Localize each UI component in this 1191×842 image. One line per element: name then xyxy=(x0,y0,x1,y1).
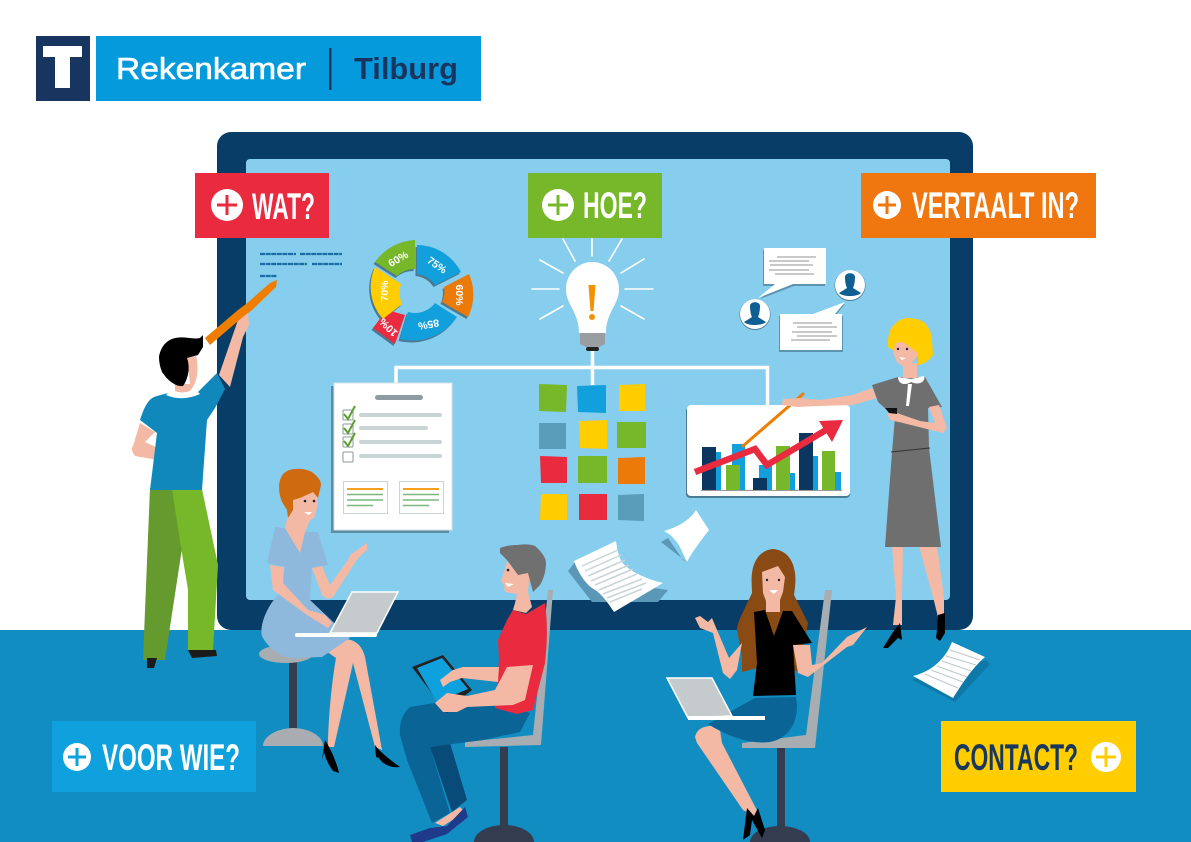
pointer stick xyxy=(743,394,803,446)
light bulb xyxy=(532,238,653,351)
label: HOE?: HOE? xyxy=(583,185,647,226)
label: VERTAALT IN?: VERTAALT IN? xyxy=(912,185,1079,226)
chair xyxy=(465,590,553,842)
flying paper large xyxy=(568,541,668,612)
facial features xyxy=(505,569,514,587)
hair xyxy=(737,549,808,672)
label: VOOR WIE? xyxy=(52,721,256,792)
waist belt xyxy=(891,448,930,452)
tablet xyxy=(412,655,472,713)
face and neck xyxy=(762,566,785,612)
label: CONTACT?: CONTACT? xyxy=(954,737,1078,778)
white collar xyxy=(166,392,200,398)
floor xyxy=(0,630,1191,842)
collar xyxy=(898,376,924,406)
face xyxy=(893,340,918,366)
seated man with tablet xyxy=(400,544,553,842)
legs xyxy=(695,726,762,820)
arms xyxy=(270,543,367,628)
hair xyxy=(279,469,321,518)
trousers xyxy=(143,488,184,660)
sock xyxy=(435,807,465,826)
skirt xyxy=(885,448,941,547)
floor paper xyxy=(912,642,990,702)
presenting woman xyxy=(782,318,947,648)
hair xyxy=(159,335,203,386)
label: HOE? xyxy=(528,173,662,238)
head and neck xyxy=(501,562,532,613)
legs xyxy=(323,639,382,750)
neck and neckline xyxy=(285,505,310,553)
bar chart card xyxy=(686,405,850,498)
shoes xyxy=(322,740,400,773)
shoes xyxy=(883,613,945,648)
legs xyxy=(892,546,944,625)
far leg xyxy=(430,743,467,812)
neck and head skin xyxy=(175,356,198,392)
sticky notes xyxy=(539,384,646,521)
donut chart: 60% xyxy=(453,284,465,306)
hair xyxy=(888,318,933,365)
laptop xyxy=(667,678,765,720)
donut chart: 10% xyxy=(377,315,401,339)
back arm xyxy=(887,405,947,433)
hair xyxy=(500,544,546,592)
speech bubbles xyxy=(740,248,866,352)
donut chart xyxy=(369,240,473,346)
shoes xyxy=(743,808,765,840)
shirt xyxy=(140,373,225,490)
chair xyxy=(742,590,832,842)
dress xyxy=(261,527,350,658)
presentation board xyxy=(217,132,973,630)
rear arm xyxy=(440,667,499,687)
outstretched arm xyxy=(782,388,877,407)
left arm xyxy=(132,423,158,460)
trousers xyxy=(400,703,530,823)
man writing on the board xyxy=(132,280,277,668)
connector lines xyxy=(396,350,768,405)
handwriting on board xyxy=(260,254,342,276)
logo xyxy=(36,36,481,101)
skirt xyxy=(708,697,797,743)
donut chart: 85% xyxy=(416,316,440,332)
seated woman in black xyxy=(667,549,867,842)
front arm xyxy=(435,665,533,712)
arms xyxy=(695,616,867,679)
stool xyxy=(259,645,323,746)
shoes xyxy=(147,658,157,668)
raised arm xyxy=(219,312,249,387)
face xyxy=(292,488,318,522)
donut chart: 70% xyxy=(379,280,391,302)
neck xyxy=(903,363,917,378)
donut chart: 75% xyxy=(425,255,449,277)
label: WAT? xyxy=(195,173,329,238)
logo: Rekenkamer xyxy=(116,51,306,86)
black top xyxy=(753,610,812,696)
logo: Tilburg xyxy=(354,51,458,86)
donut chart: 60% xyxy=(386,249,411,270)
pen xyxy=(205,280,277,345)
flying paper small xyxy=(661,510,709,563)
label: VOOR WIE?: VOOR WIE? xyxy=(102,737,240,778)
label: WAT?: WAT? xyxy=(252,186,315,227)
checklist document xyxy=(331,383,452,533)
jacket xyxy=(872,377,942,452)
shirt xyxy=(495,603,547,714)
phone xyxy=(885,408,897,414)
laptop xyxy=(295,592,398,637)
label: CONTACT? xyxy=(941,721,1136,792)
label: VERTAALT IN? xyxy=(861,173,1096,238)
shoe xyxy=(410,807,468,842)
seated woman with laptop xyxy=(259,469,400,773)
